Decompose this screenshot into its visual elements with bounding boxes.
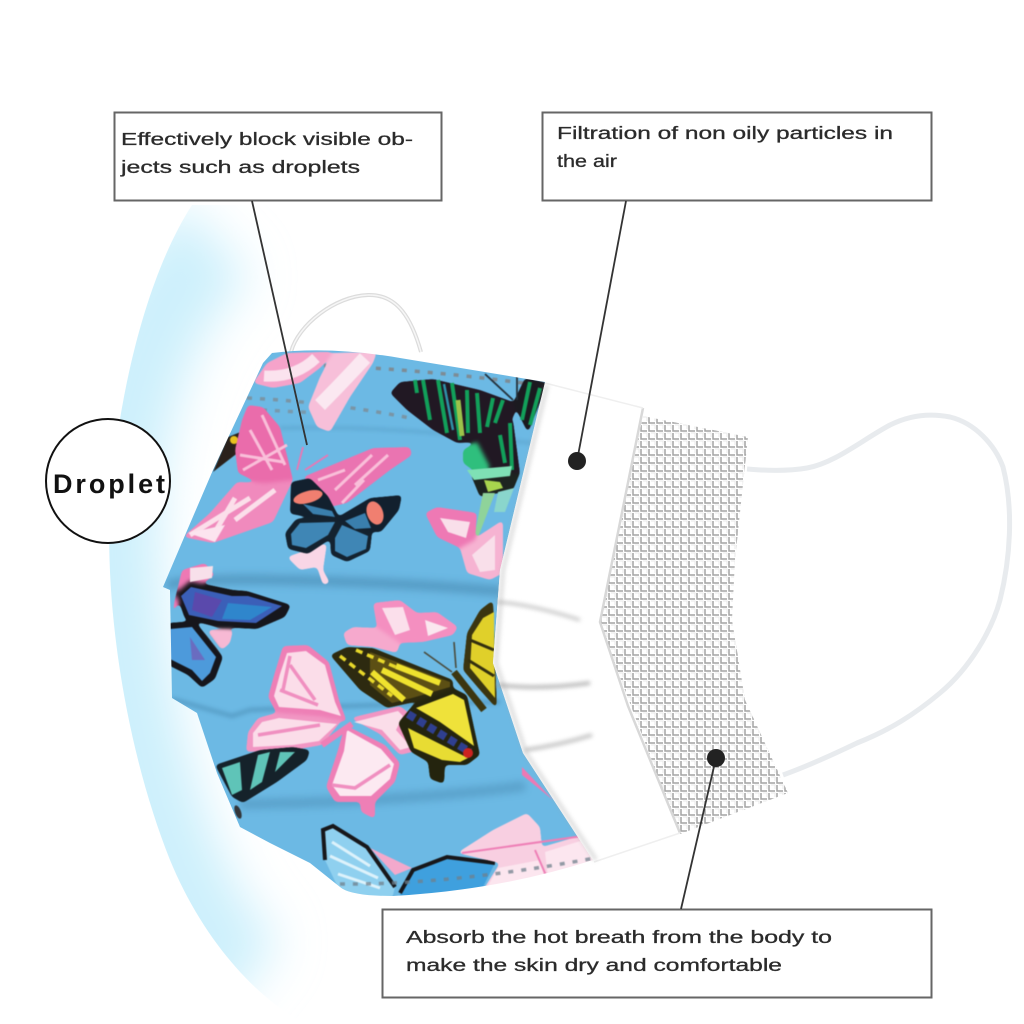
inner mesh layer [600,416,788,834]
mask white side panel [493,383,680,862]
callout box: non oily particles: Filtration of non oily particles in [557,123,893,143]
leader line: inner layer with dot [681,749,725,909]
butterfly: teal striped [215,747,310,820]
mask front: printed butterfly panel [163,350,592,896]
butterfly: yellow swallowtail [330,600,497,784]
leader line: middle layer with dot [568,201,626,470]
callout box: visible objects: jects such as droplets [120,157,360,177]
callout box: non oily particles: the air [557,151,617,171]
droplet circle label: Droplet [53,469,165,499]
butterfly: dark green striped [390,372,548,540]
butterfly: bottom morpho [323,826,495,899]
butterfly: pale pink bottom right [460,766,593,886]
droplet shield crescent [109,240,248,980]
leader line: outer layer [252,201,307,445]
butterfly: dark eye wing [212,432,240,472]
fold shadows [167,428,545,804]
droplet circle label [46,419,170,543]
callout box: hot breath [382,910,932,998]
callout box: visible objects [114,112,442,200]
callout box: hot breath: Absorb the hot breath from the body to [406,927,832,947]
ear loop: right [747,415,1010,775]
butterfly: pink lower right of upper panel [425,507,503,580]
butterfly: large pale pink [246,645,420,819]
ear loop: top [291,295,421,352]
butterfly: blue morpho left [168,563,291,688]
callout box: hot breath: make the skin dry and comfortable [406,955,782,975]
butterfly: small pink [343,600,458,653]
butterfly: large pink [183,405,412,585]
stitch dots: bottom [340,858,595,884]
callout box: non oily particles [542,112,932,200]
butterfly: blue with red patches [285,478,402,562]
callout box: visible objects: Effectively block visible ob- [121,129,413,149]
butterfly: pink top [253,352,377,432]
stitch dots [247,364,530,418]
